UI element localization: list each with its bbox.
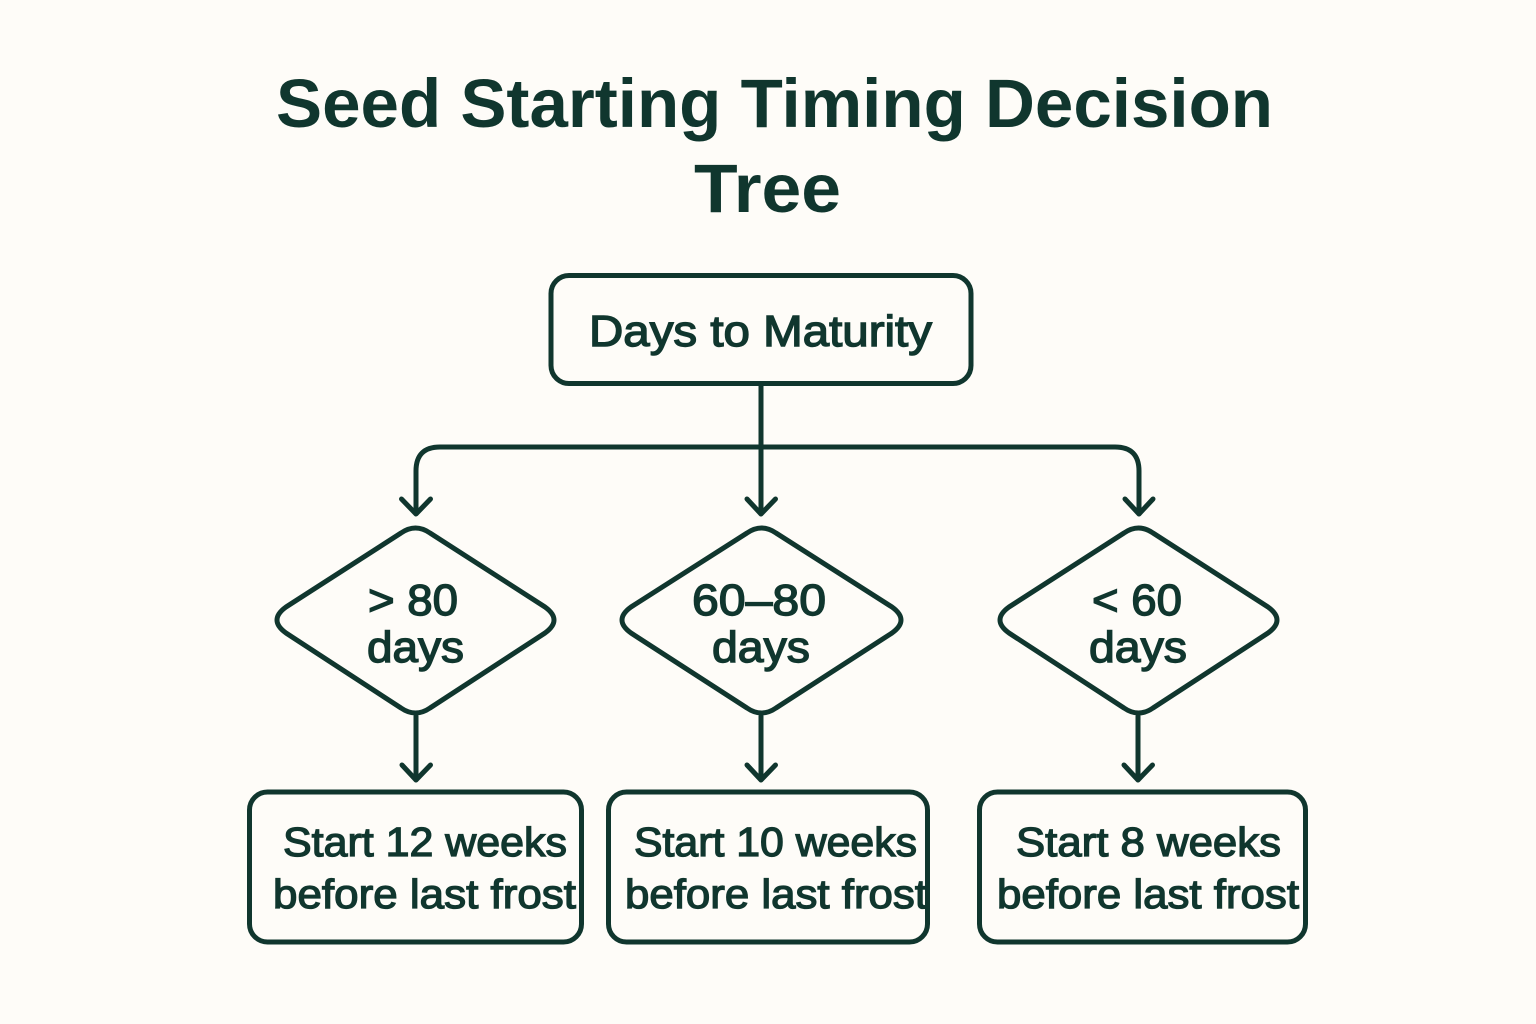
result box: start 10 weeks: before last frost [625,871,928,917]
branching connector with arrows [402,385,1153,514]
decision diamond: over 80 days: days [367,623,464,672]
decision diamond: under 60 days: days [1089,623,1187,672]
result box: start 12 weeks: before last frost [273,871,577,917]
arrow: under 60 days to result [1124,716,1152,780]
decision diamond: 60 to 80 days: days [712,623,810,672]
title [276,65,1273,227]
decision diamond: under 60 days [1000,528,1277,713]
decision diamond: over 80 days: > 80 [368,576,458,625]
title: Tree [694,150,841,227]
decision diamond: 60 to 80 days [622,528,901,713]
arrow: 60 to 80 days to result [747,716,776,780]
result box: start 8 weeks: before last frost [997,871,1300,917]
root box: days to maturity [551,276,971,384]
result box: start 10 weeks: Start 10 weeks [634,819,917,865]
result box: start 8 weeks [980,792,1306,942]
title: Seed Starting Timing Decision [276,65,1273,142]
result box: start 8 weeks: Start 8 weeks [1016,819,1281,865]
result box: start 12 weeks [250,792,582,942]
root box: days to maturity: Days to Maturity [589,307,932,356]
result box: start 10 weeks [608,792,928,942]
decision diamond: over 80 days [277,528,554,713]
decision diamond: under 60 days: < 60 [1092,576,1182,625]
decision diamond: 60 to 80 days: 60–80 [692,576,826,625]
result box: start 12 weeks: Start 12 weeks [283,819,567,865]
arrow: over 80 days to result [402,716,430,780]
